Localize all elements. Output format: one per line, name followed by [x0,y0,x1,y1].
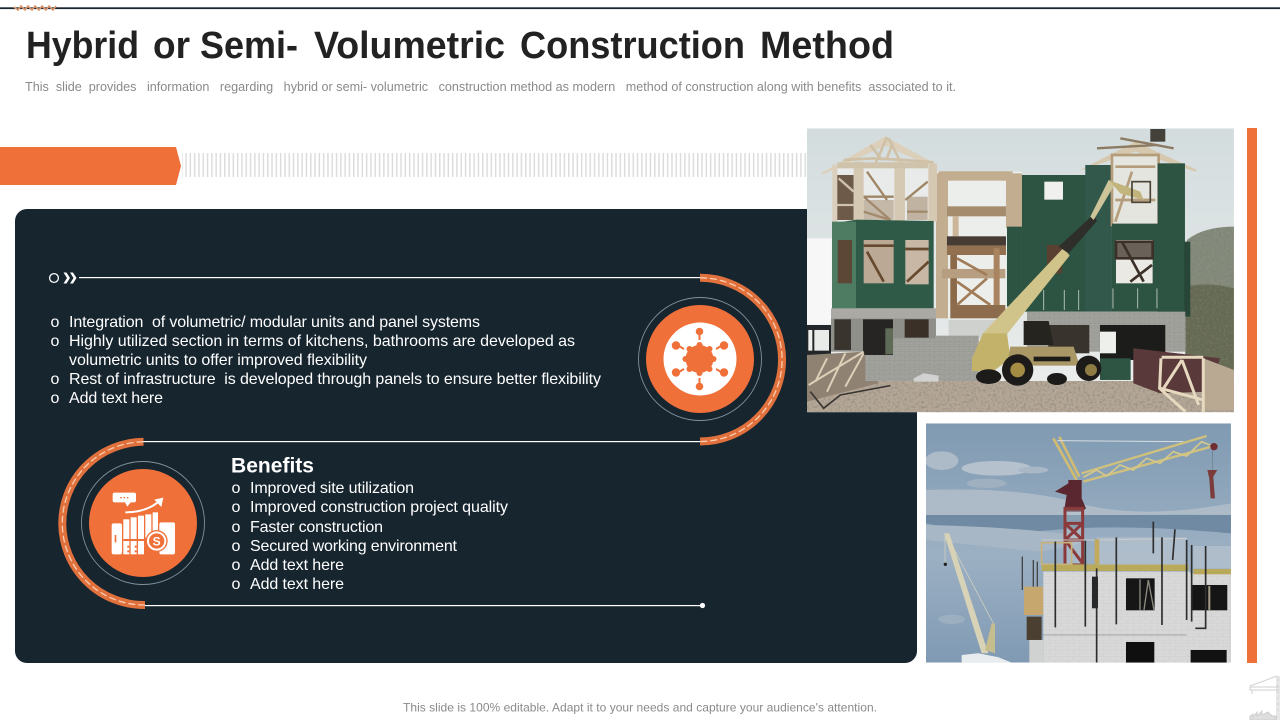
upper section marker [50,272,76,284]
icon: benefits growth: S [153,534,161,548]
icon: benefits growth [62,442,205,605]
benefits list: Add text here [250,557,344,574]
title: or [153,25,190,67]
second crane [944,533,1012,663]
telehandler [972,180,1150,386]
benefits list: o [232,519,240,536]
bullet list: method description: Rest of infrastructure is developed through panels to ensure better flexibility [69,371,601,388]
top zigzag ornament [14,6,56,10]
benefits list: Improved construction project quality [250,499,508,516]
bullet list: method description: volumetric units to offer improved flexibility [69,352,367,369]
orange vertical bar [1247,128,1257,663]
title: Method [760,25,894,67]
tree [1185,227,1234,372]
side scaffold [1022,557,1043,663]
right green wall [1007,129,1197,317]
orange arrow banner [0,147,181,185]
benefits heading: Benefits [231,454,314,478]
bullet list: method description: Integration of volumetric/ modular units and panel systems [69,314,480,331]
ground [807,381,1234,412]
benefits list: o [232,499,240,516]
bullet list: method description: o [50,390,60,407]
bullet list: method description: Add text here [69,390,163,407]
photo: house under construction [807,128,1234,412]
bullet list: method description: o [50,371,60,388]
benefits list: Secured working environment [250,538,458,555]
bullet list: method description: o [50,333,60,350]
benefits list: o [232,538,240,555]
bullet list: method description: Highly utilized section in terms of kitchens, bathrooms are developed as [69,333,575,350]
title: Semi- [200,25,298,67]
central timber frame [935,172,1022,318]
top rule [0,7,1280,9]
icon: faint crane watermark [1250,676,1279,720]
icon: modular hub [638,278,782,442]
hatched strip [182,153,807,177]
bullet list: method description: o [50,314,60,331]
footer note: This slide is 100% editable. Adapt it to your needs and capture your audience's attention. [403,700,877,714]
benefits list: o [232,480,240,497]
left tower top frame [821,136,937,222]
subtitle: This slide provides information regarding hybrid or semi- volumetric construction method as modern method of construction along with benefits associated to it. [25,79,956,94]
title: Construction [520,25,745,67]
building [1042,522,1231,663]
block foundation [831,308,1185,382]
title: Volumetric [314,25,505,67]
benefits list: o [232,576,240,593]
benefits list [232,480,508,593]
title: Hybrid [26,25,139,67]
line bottom with end dot [145,603,705,608]
timber trusses left [809,352,890,408]
title [26,25,894,67]
dumpster [1133,348,1234,412]
benefits list: Faster construction [250,519,383,536]
left tower green wall [832,220,934,308]
line middle [143,441,701,442]
benefits list: Improved site utilization [250,480,414,497]
bullet list: method description [50,314,601,407]
benefits list: Add text here [250,576,344,593]
tower crane [1053,436,1218,565]
dark panel [15,209,917,663]
photo: crane and block building [925,423,1231,663]
benefits list: o [232,557,240,574]
line top [79,277,701,278]
